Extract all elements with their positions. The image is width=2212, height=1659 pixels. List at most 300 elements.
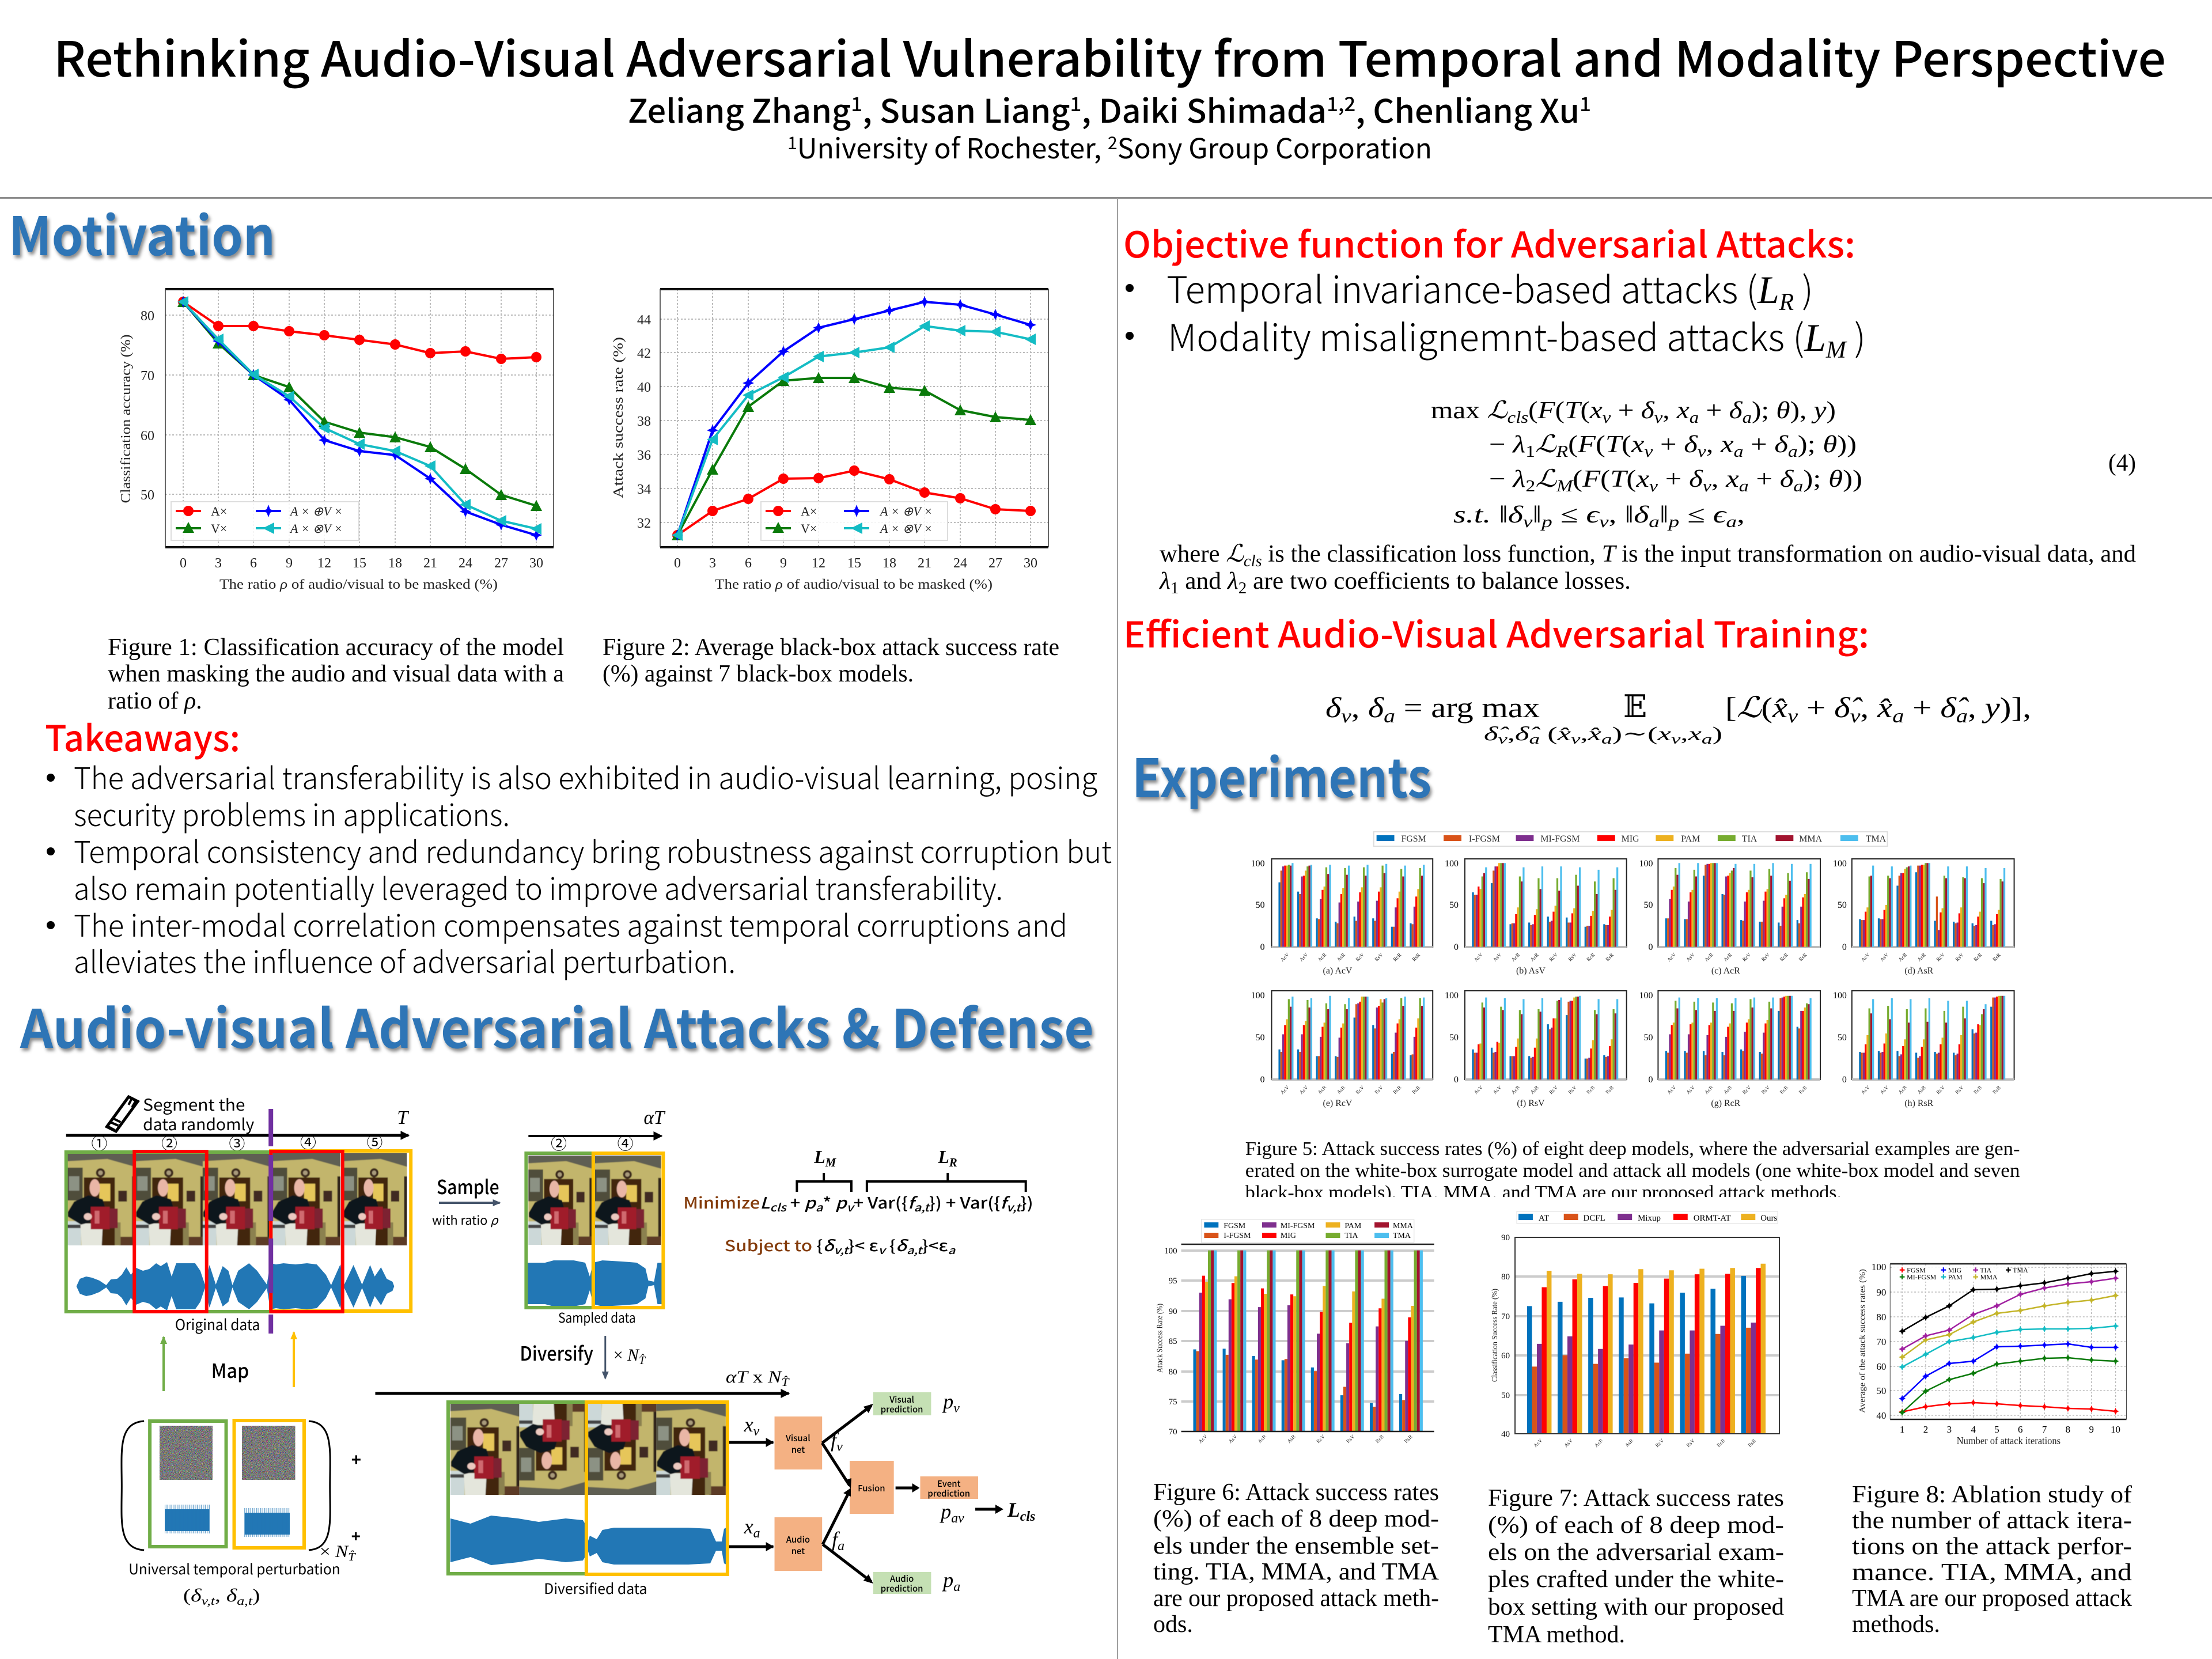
caption: Figure 8: the number of attack itera- [1852,1508,2132,1534]
chart: Figure 5 (e) RcV: AcR [1317,1084,1327,1095]
formula: minimize objective: f [908,1191,918,1213]
chart: Figure 5 (c) AcR: RcV [1741,952,1752,963]
caption: Figure 7: ples crafted under the white- [1488,1566,1784,1593]
equation 4: F(T(x [1578,431,1642,458]
text block: takeaways bullets: The adversarial transferability is also exhibited in audio-visual learning, posing [74,755,1097,798]
equation: adversarial training: v [1571,732,1581,747]
equation: adversarial training: x [1657,724,1671,745]
equation 4: δ [1729,397,1743,424]
segment numbers: ⑤ [367,1130,382,1153]
chart: Figure 1 classification accuracy: 27 [494,556,508,571]
text block: takeaways bullets: Temporal consistency and redundancy bring robustness against corruption but [74,828,1112,872]
arrow: diversify: Diversify [520,1338,593,1366]
text block: loss description: 2 [1238,579,1247,597]
chart: Figure 8 ablation study: ✚ PAM [1941,1273,1963,1281]
segment numbers [92,1130,382,1154]
chart: Figure 8 ablation study: 80 [1876,1312,1886,1323]
chart: Figure 5 (e) RcV: RcR [1392,1085,1403,1095]
caption: Figure 6: ting. TIA, MMA, and TMA [1153,1559,1440,1585]
chart: Figure 5 (a) AcV: AsR [1336,952,1346,963]
equation: adversarial training: a [1529,732,1540,747]
caption: Figure 7: box setting with our proposed [1488,1594,1784,1620]
chart: Figure 6 ensemble attack: 80 [1169,1368,1177,1377]
affiliations: University of Rochester, [797,126,1108,166]
formula: minimize objective: a [948,1243,956,1257]
arrow: sampled axis alpha T: ② [551,1131,567,1154]
label: segment the data randomly: data randomly [143,1112,255,1135]
legend: Figure 5: MMA [1799,834,1823,844]
chart: Figure 5 (h) RsR: AsR [1916,1085,1927,1095]
chart: Figure 8 ablation study: 3 [1947,1424,1952,1435]
chart: Figure 1 classification accuracy: 6 [250,556,257,571]
equation 4: v [1644,443,1653,461]
chart: Figure 8 ablation study: 9 [2089,1424,2094,1435]
chart: Figure 8 ablation study: ✚ MMA [1973,1273,1998,1281]
chart: Figure 5 (c) AcR: AsV [1685,952,1696,963]
equation: adversarial training [1325,690,2031,747]
chart: Figure 2 attack success rate: 42 [637,346,651,361]
chart: Figure 5 (g) RcR: AcV [1666,1084,1677,1095]
label: original data: Original data [175,1313,260,1335]
text block: attack list: ) [1846,309,1866,362]
text block: attack list: ) [1794,261,1813,314]
chart: Figure 7 white-box training: AcR [1593,1437,1604,1448]
chart: Figure 7 white-box training: RsR [1747,1438,1757,1448]
equation 4: (4) [2108,450,2136,476]
network: prediction flow: a [838,1539,844,1554]
chart: Figure 7 white-box training: AsR [1624,1438,1634,1448]
chart: Figure 5 (c) AcR: RsR [1798,952,1808,962]
formula: minimize objective: a,t [907,1243,923,1257]
network: prediction flow: prediction [927,1487,970,1499]
chart: Figure 6 ensemble attack: 95 [1169,1277,1177,1286]
segment numbers: ① [92,1131,107,1154]
equation 4: v [1649,478,1658,495]
caption: Figure 8: methods. [1852,1611,1940,1638]
universal temporal perturbation: (δ [183,1585,199,1605]
arrow: diversify [520,1336,646,1378]
equation 4: ( [1528,397,1538,424]
caption: Figure 6 [1153,1479,1440,1638]
chart: Figure 1 classification accuracy: The ratio ρ of audio/visual to be masked (%) [219,577,498,592]
heading: Objective function: Objective function for Adversarial Attacks: [1123,216,1855,268]
segment numbers: ③ [229,1131,245,1154]
equation 4: δ [1774,431,1789,458]
equation: adversarial training: a [1956,706,1968,727]
caption: Figure 1: Figure 1: Classification accuracy of the model [108,634,564,661]
equation 4: − λ [1489,466,1524,493]
caption: Figure 7: els on the adversarial exam- [1488,1539,1784,1566]
equation 4: + [1611,397,1641,424]
heading: Motivation: Motivation [9,194,275,271]
formula: minimize objective: v [847,1199,855,1215]
equation 4: θ), y) [1776,397,1835,424]
equation 4: p [1667,513,1679,531]
equation: adversarial training: + [1798,691,1834,724]
caption: Figure 6: ods. [1153,1611,1193,1638]
chart: Figure 5 (g) RcR: RcV [1741,1084,1752,1095]
chart: Figure 5 (f) RsV: RcV [1548,1084,1559,1095]
chart: Figure 5 (c) AcR: RsV [1760,952,1771,963]
chart: Figure 8 ablation study: 90 [1876,1287,1886,1298]
chart: Figure 5 (h) RsR: 100 [1833,991,1847,1001]
formula: minimize objective: }) [1021,1191,1033,1213]
chart: Figure 5 (e) RcV: RsV [1373,1084,1384,1095]
chart: Figure 5 (d) AsR: 100 [1833,859,1847,869]
chart: Figure 7 white-box training: RsV [1685,1437,1696,1448]
equation 4: ϵ [1713,502,1728,528]
text block: loss description: are two coefficients to balance losses. [1247,568,1631,594]
caption: Figure 6: are our proposed attack meth- [1153,1585,1439,1612]
chart: Figure 5 (b) AsV [1445,859,1627,976]
universal temporal perturbation: + [351,1527,361,1545]
chart: Figure 5 (f) RsV: 0 [1454,1075,1459,1085]
chart: Figure 1 classification accuracy: 3 [215,556,222,571]
text block: attack list: M [1825,337,1847,363]
chart: Figure 8 ablation study: 100 [1872,1262,1886,1272]
text block: loss description: where ℒ [1160,541,1243,567]
network: prediction flow: Audio [786,1533,810,1546]
label: segment the data randomly [143,1093,255,1135]
equation 4: a [1788,443,1798,461]
equation: adversarial training: v [1787,706,1798,727]
chart: Figure 2 attack success rate: 24 [953,556,967,571]
chart: Figure 5 (g) RcR: AcR [1703,1084,1714,1095]
chart: Figure 5 (e) RcV: RcV [1354,1084,1365,1095]
arrow: sampled axis alpha T: ④ [618,1131,634,1154]
arrows: map perturbation: Map [211,1355,249,1384]
equation: adversarial training: 𝔼 [1623,690,1647,724]
chart: Figure 8 ablation study: ✚ MIG [1941,1266,1961,1274]
chart: Figure 5 (h) RsR: (h) RsR [1904,1099,1934,1108]
text block: loss description: is the classification loss function, [1262,541,1602,567]
chart: Figure 8 ablation study: 1 [1900,1424,1904,1435]
chart: Figure 2 attack success rate: 44 [637,313,651,328]
network: prediction flow: cls [1020,1509,1035,1524]
chart: Figure 2 attack success rate: 38 [637,414,651,429]
chart: Figure 5 (b) AsV: AcR [1510,952,1521,963]
segment numbers: ② [161,1131,177,1154]
chart: Figure 8 ablation study [1858,1262,2126,1446]
formula: minimize objective: a,t [914,1199,931,1215]
chart: Figure 8 ablation study: 5 [1994,1424,1999,1435]
chart: Figure 5 (d) AsR: RcR [1972,952,1983,963]
chart: Figure 1 classification accuracy: A× [211,504,227,518]
chart: Figure 5 (b) AsV: RsR [1604,952,1615,962]
equation: adversarial training: , [1351,691,1368,724]
chart: Figure 5 (g) RcR: AsR [1722,1085,1733,1095]
header: title block [54,21,2166,166]
diagram: audio-visual attack pipeline [66,1093,1035,1608]
chart: Figure 2 attack success rate: Attack success rate (%) [611,337,626,498]
chart: Figure 5 (d) AsR: 0 [1842,942,1847,952]
equation 4: a [1743,409,1752,427]
universal temporal perturbation [122,1421,361,1608]
equation 4: − λ [1489,431,1523,458]
chart: Figure 5 (e) RcV: AsR [1336,1085,1346,1095]
chart: Figure 5 (a) AcV [1251,859,1433,976]
equation: adversarial training: = arg max [1395,691,1540,724]
segment numbers: ④ [300,1130,316,1153]
text block: takeaways bullets: alleviates the influence of adversarial perturbation. [74,938,736,982]
legend: Figure 5 [1374,832,1888,846]
network: prediction flow [729,1390,1035,1594]
chart: Figure 7 white-box training: 40 [1501,1430,1510,1439]
caption: Figure 6: els under the ensemble set- [1153,1533,1439,1559]
network: prediction flow: Event [937,1478,961,1490]
network: prediction flow: f [832,1528,838,1551]
chart: Figure 5 (f) RsV: AsR [1529,1085,1540,1095]
chart: Figure 2 attack success rate: A× [801,504,817,518]
equation 4: v [1523,513,1533,531]
equation: adversarial training: δ̂ [1484,724,1510,745]
chart: Figure 7 white-box training: 90 [1501,1233,1510,1243]
equation 4: + [1749,466,1780,493]
caption: Figure 8: mance. TIA, MMA, and [1852,1559,2132,1586]
equation: adversarial training: , [1680,724,1688,745]
chart: Figure 8 ablation study: ✚ TMA [2005,1266,2028,1274]
formula: minimize objective: a [816,1199,823,1215]
legend: Figure 5: FGSM [1401,834,1426,844]
chart: Figure 5 (f) RsV: AcV [1473,1084,1484,1095]
equation: adversarial training: v [1341,706,1352,727]
icon: saw [107,1097,138,1131]
label: segment the data randomly: Segment the [143,1093,245,1116]
chart: Figure 5 (e) RcV [1251,991,1433,1108]
chart: Figure 1 classification accuracy: 21 [423,556,437,571]
chart: Figure 6 ensemble attack: 100 [1164,1247,1177,1256]
caption: Figure 8 [1852,1482,2132,1638]
equation 4: ‖ [1532,502,1541,528]
chart: Figure 5 (h) RsR: RsR [1991,1085,2002,1095]
chart: Figure 5 (f) RsV: RcR [1585,1085,1596,1095]
equation: adversarial training: δ [1368,691,1384,724]
text block: attack list [1126,261,1866,363]
equation: adversarial training: x̂ [1587,724,1601,745]
caption: Figure 7: TMA method. [1488,1622,1625,1648]
affiliations: Sony Group Corporation [1118,126,1432,166]
chart: Figure 6 ensemble attack: MMA [1393,1222,1413,1230]
network: prediction flow: a [953,1580,960,1594]
chart: Figure 2 attack success rate: A × ⊗V × [879,521,933,536]
equation 4: x [1676,397,1690,424]
chart: Figure 5 (e) RcV: AcV [1279,1084,1290,1095]
chart: Figure 5 (c) AcR: RcR [1779,952,1789,963]
chart: Figure 8 ablation study: 8 [2066,1424,2070,1435]
chart: Figure 2 attack success rate: 21 [918,556,931,571]
chart: Figure 7 white-box training: Mixup [1638,1214,1661,1223]
chart: Figure 2 attack success rate: 0 [674,556,681,571]
legend: Figure 5: TMA [1866,834,1887,844]
equation: adversarial training: v [1498,732,1508,747]
caption: Figure 2: (%) against 7 black-box models. [603,661,914,687]
authors: Zeliang Zhang [628,86,846,132]
chart: Figure 8 ablation study: 50 [1876,1385,1886,1396]
text block: attack list: R [1779,289,1794,316]
chart: Figure 5 (b) AsV: 0 [1454,942,1459,952]
equation 4: θ)) [1828,466,1859,493]
chart: Figure 5 (d) AsR: AsR [1916,952,1927,963]
chart: Figure 1 classification accuracy: 60 [141,429,154,444]
chart: Figure 6 ensemble attack: TMA [1393,1232,1411,1240]
equation 4: ( [1568,431,1578,458]
chart: Figure 5 (f) RsV: (f) RsV [1517,1099,1545,1108]
formula: minimize objective: + [786,1191,804,1213]
caption: Figure 5: black-box models). TIA, MMA, and TMA are our proposed attack methods. [1245,1182,1842,1203]
arrow: diversified axis: αT x N [726,1368,779,1387]
equation 4: , [1662,397,1677,424]
equation: adversarial training: δ̂ [1834,691,1863,724]
authors: , Susan Liang [862,86,1070,132]
chart: Figure 5 (b) AsV: RcR [1585,952,1596,963]
chart: Figure 2 attack success rate: A × ⊕V × [879,504,933,518]
text block: loss description: λ [1226,568,1238,594]
affiliations: 1 [787,129,797,154]
original data: frames and waveform [66,1109,411,1334]
chart: Figure 2 attack success rate: 30 [1024,556,1037,571]
equation 4: δ [1634,502,1650,528]
heading: Audio-visual Adversarial Attacks & Defense: Audio-visual Adversarial Attacks & Defense [20,987,1094,1063]
chart: Figure 5 (b) AsV: (b) AsV [1516,966,1546,976]
universal temporal perturbation: a,t [237,1594,253,1608]
caption: Figure 8: Figure 8: Ablation study of [1852,1482,2132,1508]
chart: Figure 5 (a) AcV: AcR [1317,952,1327,963]
chart: Figure 6 ensemble attack: Attack Success Rate (%) [1156,1304,1165,1373]
chart: Figure 6 ensemble attack [1156,1219,1434,1444]
formula: minimize objective: * [823,1191,835,1213]
chart: Figure 1 classification accuracy: Classification accuracy (%) [119,334,134,503]
chart: Figure 5 (g) RcR: (g) RcR [1711,1099,1741,1108]
network: prediction flow: prediction [881,1403,923,1415]
equation: adversarial training: δ̂ [1515,724,1541,745]
chart: Figure 7 white-box training: RcV [1654,1437,1665,1448]
chart: Figure 5 (b) AsV: RsV [1567,952,1578,963]
network: prediction flow: av [951,1511,964,1526]
network: prediction flow: x [744,1413,753,1436]
text block: takeaways bullets: The inter-modal correlation compensates against temporal corruptions and [74,902,1067,945]
chart: Figure 5 (c) AcR: 0 [1648,942,1653,952]
formula: minimize objective: p [835,1191,848,1213]
formula: minimize objective: }< ε [848,1234,878,1256]
chart: Figure 6 ensemble attack: FGSM [1224,1222,1245,1230]
equation 4: a [1739,478,1749,495]
chart: Figure 5 (c) AcR [1639,859,1820,976]
equation 4: 1 [1525,443,1535,461]
authors: , Chenliang Xu [1355,86,1580,132]
caption: Figure 1: when masking the audio and visual data with a [108,661,564,687]
chart: Figure 7 white-box training: 70 [1501,1312,1510,1321]
text block: takeaways bullets [47,755,1112,982]
sampled data: frames and waveform [526,1153,663,1308]
equation 4: ); [1752,397,1776,424]
network: prediction flow: v [953,1401,960,1416]
equation 4: + [1699,397,1729,424]
chart: Figure 8 ablation study: ✚ FGSM [1899,1266,1926,1274]
chart: Figure 7 white-box training: Classification Success Rate (%) [1491,1289,1499,1382]
universal temporal perturbation: + [351,1450,361,1469]
equation 4: δ [1641,397,1655,424]
diversified data: frames and waveform [448,1402,728,1574]
formula: minimize objective: M [825,1156,837,1169]
chart: Figure 5 (f) RsV: AcR [1510,1084,1521,1095]
equation: adversarial training: x̂ [1877,691,1892,724]
chart: Figure 5 (a) AcV: RsR [1411,952,1421,962]
caption: Figure 5: Figure 5: Attack success rates (%) of eight deep models, where the adversarial examples are gen- [1245,1138,2020,1160]
chart: Figure 5 (d) AsR: 50 [1838,900,1847,910]
equation 4: a [1726,513,1737,531]
equation 4: s.t. ‖δ [1453,502,1519,528]
equation: adversarial training: ( [1540,724,1558,745]
text block: loss description: λ [1158,568,1171,594]
formula: minimize objective: δ [896,1234,909,1256]
authors: 1,2 [1327,89,1355,117]
equation: adversarial training: x [1687,724,1702,745]
chart: Figure 5 (g) RcR: 0 [1648,1075,1653,1085]
network: prediction flow: p [941,1500,951,1523]
chart: Figure 1 classification accuracy: 70 [141,369,154,384]
chart: Figure 5 (d) AsR: RcV [1935,952,1946,963]
chart: Figure 5 (a) AcV: (a) AcV [1323,966,1353,976]
text block: loss description [1158,541,2136,597]
arrow: time axis T: T [397,1107,409,1128]
equation 4: x [1720,431,1734,458]
formula: minimize objective: v,t [1006,1199,1022,1215]
network: prediction flow: Visual [889,1393,914,1406]
chart: Figure 5 (h) RsR: 50 [1838,1033,1847,1043]
formula: minimize objective: }) + Var({ [929,1191,1000,1213]
arrow: diversified axis [375,1368,790,1393]
chart: Figure 2 attack success rate: 32 [637,516,651,531]
caption: Figure 2 [603,634,1059,687]
equation: adversarial training: a [1601,732,1612,747]
network: prediction flow: net [791,1545,805,1557]
chart: Figure 7 white-box training [1491,1211,1779,1448]
chart: Figure 5 (d) AsR: (d) AsR [1904,966,1934,976]
chart: Figure 5 (g) RcR: RsR [1798,1085,1808,1095]
legend: Figure 5: PAM [1681,834,1700,844]
formula: minimize objective: Minimize L [683,1191,768,1213]
caption: Figure 8: tions on the attack perfor- [1852,1533,2132,1560]
chart: Figure 1 classification accuracy: A × ⊗V × [289,521,343,536]
chart: Figure 2 attack success rate: 34 [637,482,651,497]
chart: Figure 5 (e) RcV: 0 [1260,1075,1265,1085]
caption: Figure 6: (%) of each of 8 deep mod- [1153,1506,1439,1532]
chart: Figure 5 (h) RsR: RcV [1935,1084,1946,1095]
equation 4: ); [1803,466,1828,493]
chart: Figure 5 (h) RsR: AsV [1879,1084,1890,1095]
chart: Figure 5 (d) AsR: RsV [1954,952,1965,963]
chart: Figure 1 classification accuracy: 24 [459,556,472,571]
chart: Figure 5 (d) AsR: AcV [1860,952,1871,963]
formula: minimize objective: f [1000,1191,1011,1213]
chart: Figure 5 (g) RcR: 50 [1644,1033,1653,1043]
chart: Figure 5 (h) RsR: RcR [1972,1085,1983,1095]
text block: loss description: 1 [1171,579,1179,597]
chart: Figure 5 (h) RsR: AcV [1860,1084,1871,1095]
chart: Figure 6 ensemble attack: 70 [1169,1427,1177,1437]
network: prediction flow: p [943,1390,953,1413]
legend: Figure 5: MI-FGSM [1540,834,1580,844]
equation: adversarial training: x̂ [1556,724,1571,745]
network: prediction flow: f [831,1429,836,1452]
authors: 1 [1580,89,1591,117]
network: prediction flow: Audio [890,1573,914,1585]
equation 4: R [1555,443,1568,461]
chart: Figure 8 ablation study: ✚ TIA [1973,1266,1992,1274]
equation: adversarial training: , [1508,724,1515,745]
equation: adversarial training: δ [1325,691,1342,724]
chart: Figure 5 (d) AsR [1833,859,2014,976]
